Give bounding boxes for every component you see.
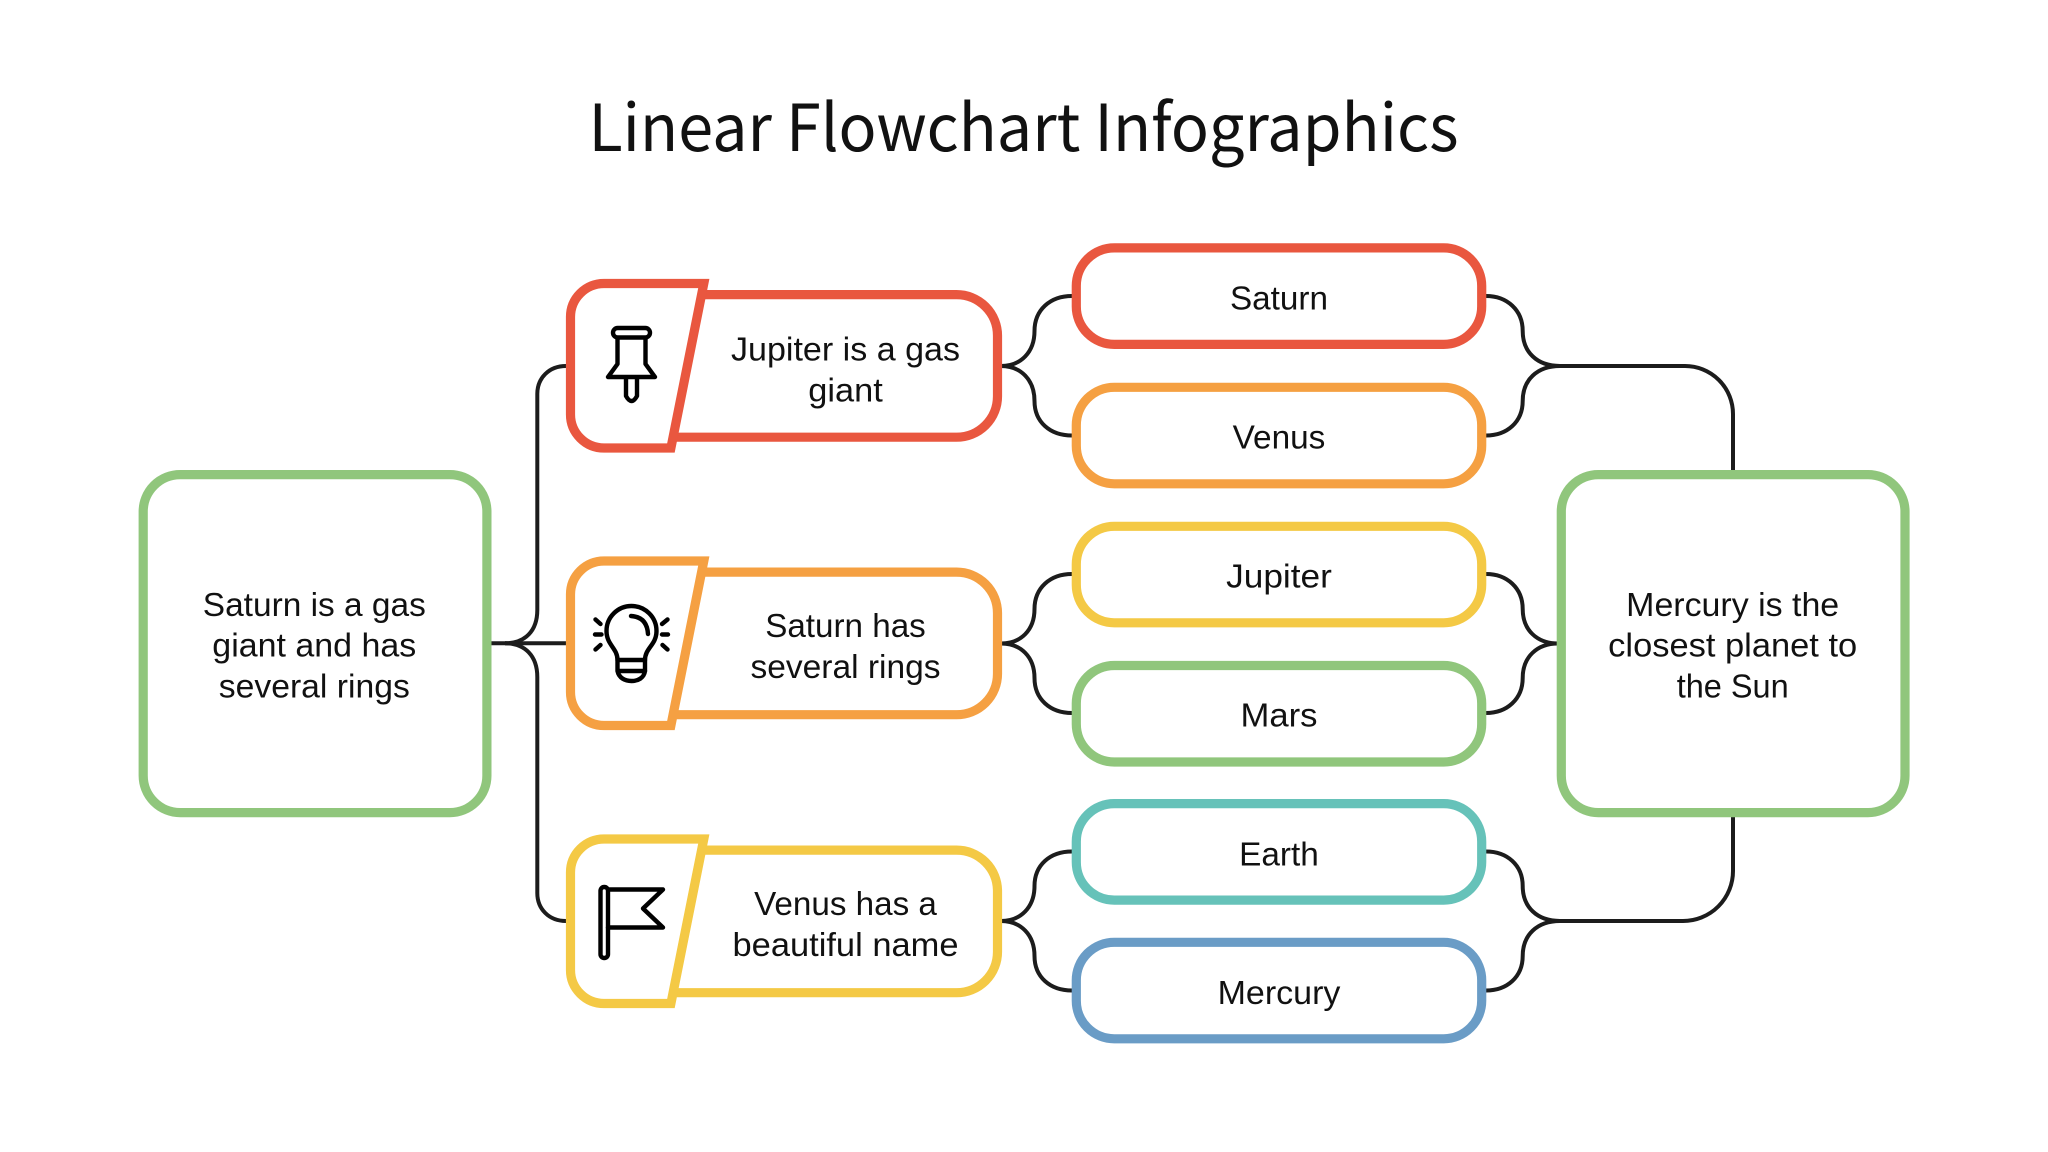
- panel: left box: Saturn is a gas: [203, 587, 426, 624]
- panel: right box: the Sun: [1677, 668, 1789, 705]
- card text: [732, 886, 958, 964]
- icon: light bulb: [595, 606, 668, 681]
- pill: Saturn: Saturn: [1230, 280, 1328, 317]
- card text: Venus has a: [754, 886, 937, 923]
- card: Venus: [570, 839, 998, 1004]
- pill: Earth: [1076, 804, 1482, 900]
- icon: push pin: [608, 328, 655, 401]
- connectors: planet pills to right box: [1486, 296, 1733, 990]
- panel: right box: closest planet to: [1608, 628, 1857, 665]
- card text: several rings: [750, 649, 940, 686]
- panel: left box: giant and has: [212, 628, 416, 665]
- pill: Mercury: [1076, 942, 1482, 1039]
- card: Jupiter: [570, 284, 998, 448]
- connectors: cards to planet pills: [1001, 296, 1072, 990]
- pill: Venus: [1076, 387, 1482, 484]
- panel: right box: Mercury is the: [1626, 587, 1839, 624]
- pill: Mars: Mars: [1240, 698, 1318, 734]
- pill: Venus: Venus: [1233, 419, 1325, 456]
- connectors: left box to cards: [491, 366, 566, 921]
- panel: left box: several rings: [219, 668, 410, 705]
- card text: giant: [808, 373, 883, 410]
- panel: left box: [143, 475, 487, 813]
- pill: Saturn: [1076, 248, 1482, 344]
- card text: Jupiter is a gas: [731, 332, 960, 369]
- title: Linear Flowchart Infographics: [588, 76, 1458, 170]
- pill: Earth: Earth: [1239, 837, 1319, 874]
- card text: Saturn has: [765, 608, 926, 645]
- pill: Jupiter: Jupiter: [1226, 558, 1332, 595]
- card text: [731, 332, 960, 410]
- panel: right box: [1561, 475, 1905, 813]
- pill: Mercury: Mercury: [1218, 975, 1341, 1012]
- icon: flag: [600, 887, 663, 958]
- card: Saturn: [570, 561, 998, 726]
- pill: Jupiter: [1076, 526, 1482, 623]
- card text: [750, 608, 940, 686]
- card text: beautiful name: [732, 927, 958, 964]
- pill: Mars: [1076, 666, 1482, 762]
